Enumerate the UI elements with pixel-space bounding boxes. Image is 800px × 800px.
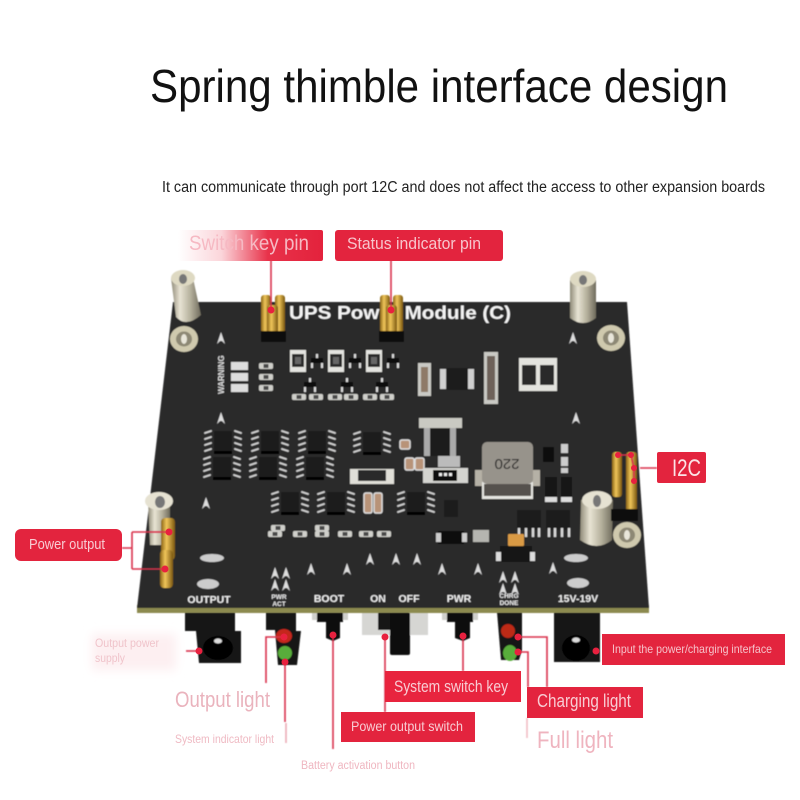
current sense resistors	[519, 358, 557, 391]
I2C pins	[611, 452, 638, 521]
label: input power charging interface	[602, 634, 785, 665]
small shunt resistor	[350, 469, 394, 484]
BOOT button	[312, 612, 348, 641]
label: output light: Output light	[175, 687, 270, 712]
input power jack	[554, 612, 600, 662]
power inductor 220	[475, 442, 540, 499]
port labels: OUTPUT	[187, 594, 231, 606]
port labels: ACT	[272, 601, 286, 608]
standoff lower right	[580, 491, 613, 546]
port labels: OFF	[398, 593, 420, 605]
indicator and via marks	[197, 332, 589, 595]
label: full light: Full light	[537, 727, 613, 754]
op-amp chip rows	[204, 431, 434, 515]
circuit board	[137, 270, 649, 613]
label: status indicator pin: Status indicator pin	[347, 234, 481, 253]
port labels: DONE	[500, 600, 519, 607]
label: output power supply	[92, 634, 176, 670]
leader dots	[162, 306, 637, 666]
connectors below board	[185, 612, 600, 665]
label: switch key pin	[178, 230, 323, 261]
port labels	[187, 593, 598, 608]
switch key pins	[261, 295, 286, 342]
status indicator pins	[379, 295, 404, 342]
subtitle: It can communicate through port 12C and does not affect the access to other expansion boards	[162, 179, 765, 196]
ON OFF slide switch	[362, 612, 428, 655]
PWR button	[442, 612, 478, 641]
label: status indicator pin	[335, 230, 503, 261]
leader lines	[122, 260, 657, 749]
board name: UPS Power Module (C)	[289, 303, 511, 323]
board edge and surface	[137, 302, 649, 613]
label: power output switch	[341, 712, 475, 742]
label: switch key pin: Switch key pin	[189, 232, 309, 255]
CHRG DONE LEDs	[497, 612, 522, 661]
standoff top left	[171, 270, 201, 322]
warning marking	[217, 355, 273, 394]
title: Spring thimble interface design	[150, 60, 728, 112]
warning marking: WARNING	[217, 355, 226, 394]
power inductor 220: 220	[494, 455, 520, 472]
label: power output	[15, 529, 122, 561]
label: power output: Power output	[29, 536, 106, 553]
power output pins	[160, 518, 175, 588]
label: output power supply: Output power	[95, 638, 159, 650]
label: charging light	[527, 687, 643, 718]
label: system indicator light: System indicator light	[175, 732, 275, 746]
standoff lower left	[145, 492, 173, 545]
switching controller	[419, 418, 468, 483]
label: charging light: Charging light	[537, 691, 631, 711]
capacitors	[364, 440, 424, 513]
label: system switch key	[385, 671, 521, 702]
port labels: 15V-19V	[558, 593, 598, 605]
mounting washers	[170, 325, 641, 548]
label: I2C: I2C	[672, 455, 701, 482]
PWR ACT LEDs	[266, 612, 301, 665]
output power jack	[185, 612, 241, 663]
bottom pad row	[268, 525, 391, 537]
parts right of inductor	[436, 444, 572, 562]
port labels: BOOT	[314, 593, 345, 605]
label: system switch key: System switch key	[394, 677, 508, 696]
port labels: ON	[370, 593, 386, 605]
label: output power supply: supply	[95, 653, 125, 665]
label: battery activation button: Battery activation button	[301, 760, 415, 772]
top power components	[290, 350, 399, 400]
standoff top right	[570, 271, 596, 323]
label: power output switch: Power output switch	[351, 718, 463, 734]
port labels: PWR	[271, 594, 287, 601]
port labels: CHRG	[499, 593, 519, 600]
label: input power charging interface: Input the power/charging interface	[612, 642, 772, 656]
port labels: PWR	[447, 593, 472, 605]
label: I2C	[657, 452, 706, 483]
resistor arrays and chip	[418, 352, 498, 404]
